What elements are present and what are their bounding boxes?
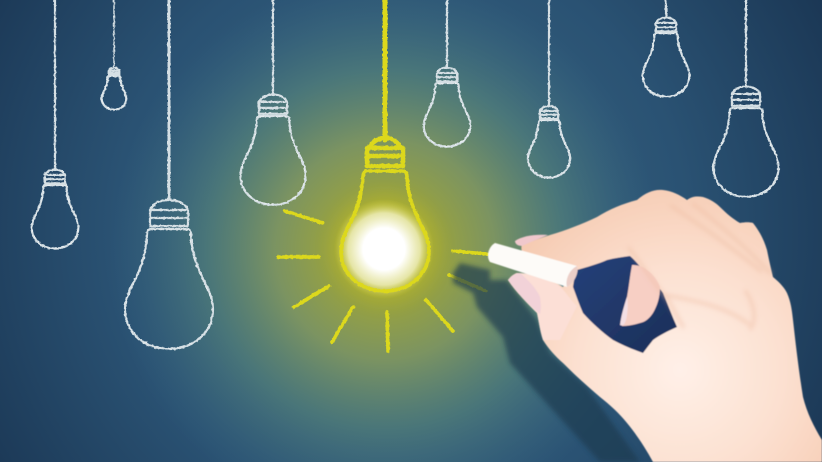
chalk light bulb upper centre bbox=[424, 0, 470, 147]
glowing yellow light bulb bbox=[333, 0, 437, 300]
curled finger bbox=[622, 265, 660, 326]
curled finger nail bbox=[620, 297, 628, 325]
thumb nail bbox=[508, 273, 541, 314]
chalk stick bbox=[488, 243, 578, 287]
hand silhouette bbox=[508, 190, 822, 462]
chalk light bulb top right bbox=[643, 0, 689, 97]
finger crease shading bbox=[628, 203, 771, 330]
yellow chalk light rays bbox=[278, 211, 487, 351]
index finger nail bbox=[515, 235, 548, 246]
gap between fingers bbox=[573, 256, 677, 353]
chalk light bulb small bbox=[102, 0, 126, 110]
chalk light bulb right of centre bbox=[528, 0, 570, 178]
chalk light bulb large left bbox=[125, 0, 213, 349]
thumb bbox=[508, 273, 577, 340]
chalk end bbox=[566, 266, 578, 287]
chalk light bulb far left bbox=[32, 0, 78, 249]
chalk light bulb medium bbox=[240, 0, 306, 205]
chalk light bulb far right bbox=[713, 0, 779, 197]
hand holding chalk bbox=[488, 190, 822, 462]
hand shadow on the board bbox=[453, 263, 640, 462]
